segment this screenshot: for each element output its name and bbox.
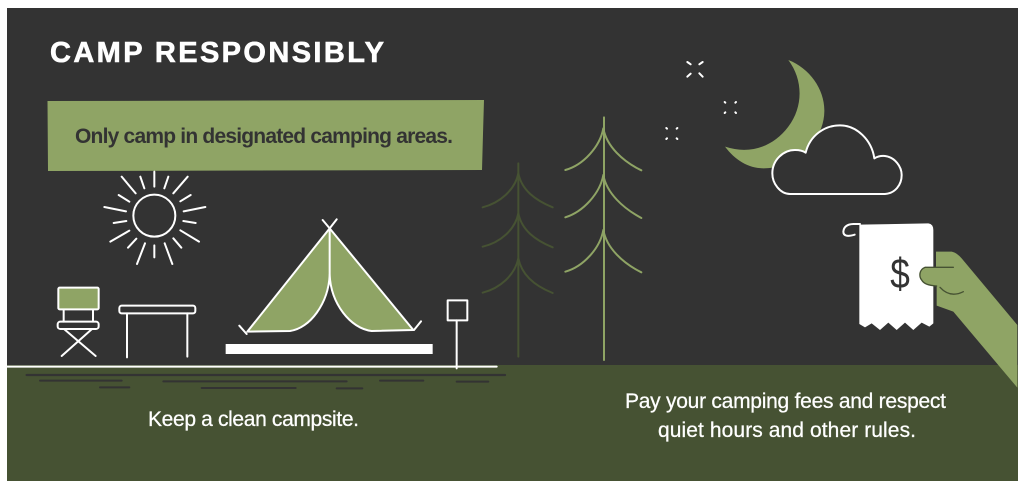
campsite illustration xyxy=(6,172,505,388)
icon: cloud xyxy=(772,125,902,194)
panel: night background xyxy=(7,8,1018,366)
caption: fees and rules xyxy=(625,390,946,442)
icon: hand xyxy=(919,252,1017,388)
icon: light pine tree xyxy=(565,117,641,360)
icon: sun xyxy=(104,172,205,264)
icon: campsite sign xyxy=(448,300,467,368)
icon: camp table xyxy=(119,306,195,357)
dollar sign: $ xyxy=(890,251,910,298)
tent platform xyxy=(226,344,433,354)
icon: stars xyxy=(666,62,736,139)
panel: ground xyxy=(7,365,1018,481)
caption: fees and rules: quiet hours and other rules. xyxy=(658,419,916,442)
icon: dark pine tree xyxy=(483,163,553,357)
caption: clean campsite: Keep a clean campsite. xyxy=(148,408,359,431)
title: CAMP RESPONSIBLY xyxy=(50,37,384,69)
hand holding receipt xyxy=(843,223,1017,388)
icon: tent xyxy=(239,219,421,334)
ground texture xyxy=(27,375,505,388)
icon: receipt xyxy=(843,223,933,330)
banner: designated camping areas xyxy=(48,100,484,171)
banner text: Only camp in designated camping areas. xyxy=(75,125,453,148)
night sky xyxy=(666,60,902,194)
ground line xyxy=(6,364,497,370)
icon: camp chair xyxy=(58,288,99,356)
caption: fees and rules: Pay your camping fees and respect xyxy=(625,390,946,413)
icon: moon xyxy=(725,60,824,168)
